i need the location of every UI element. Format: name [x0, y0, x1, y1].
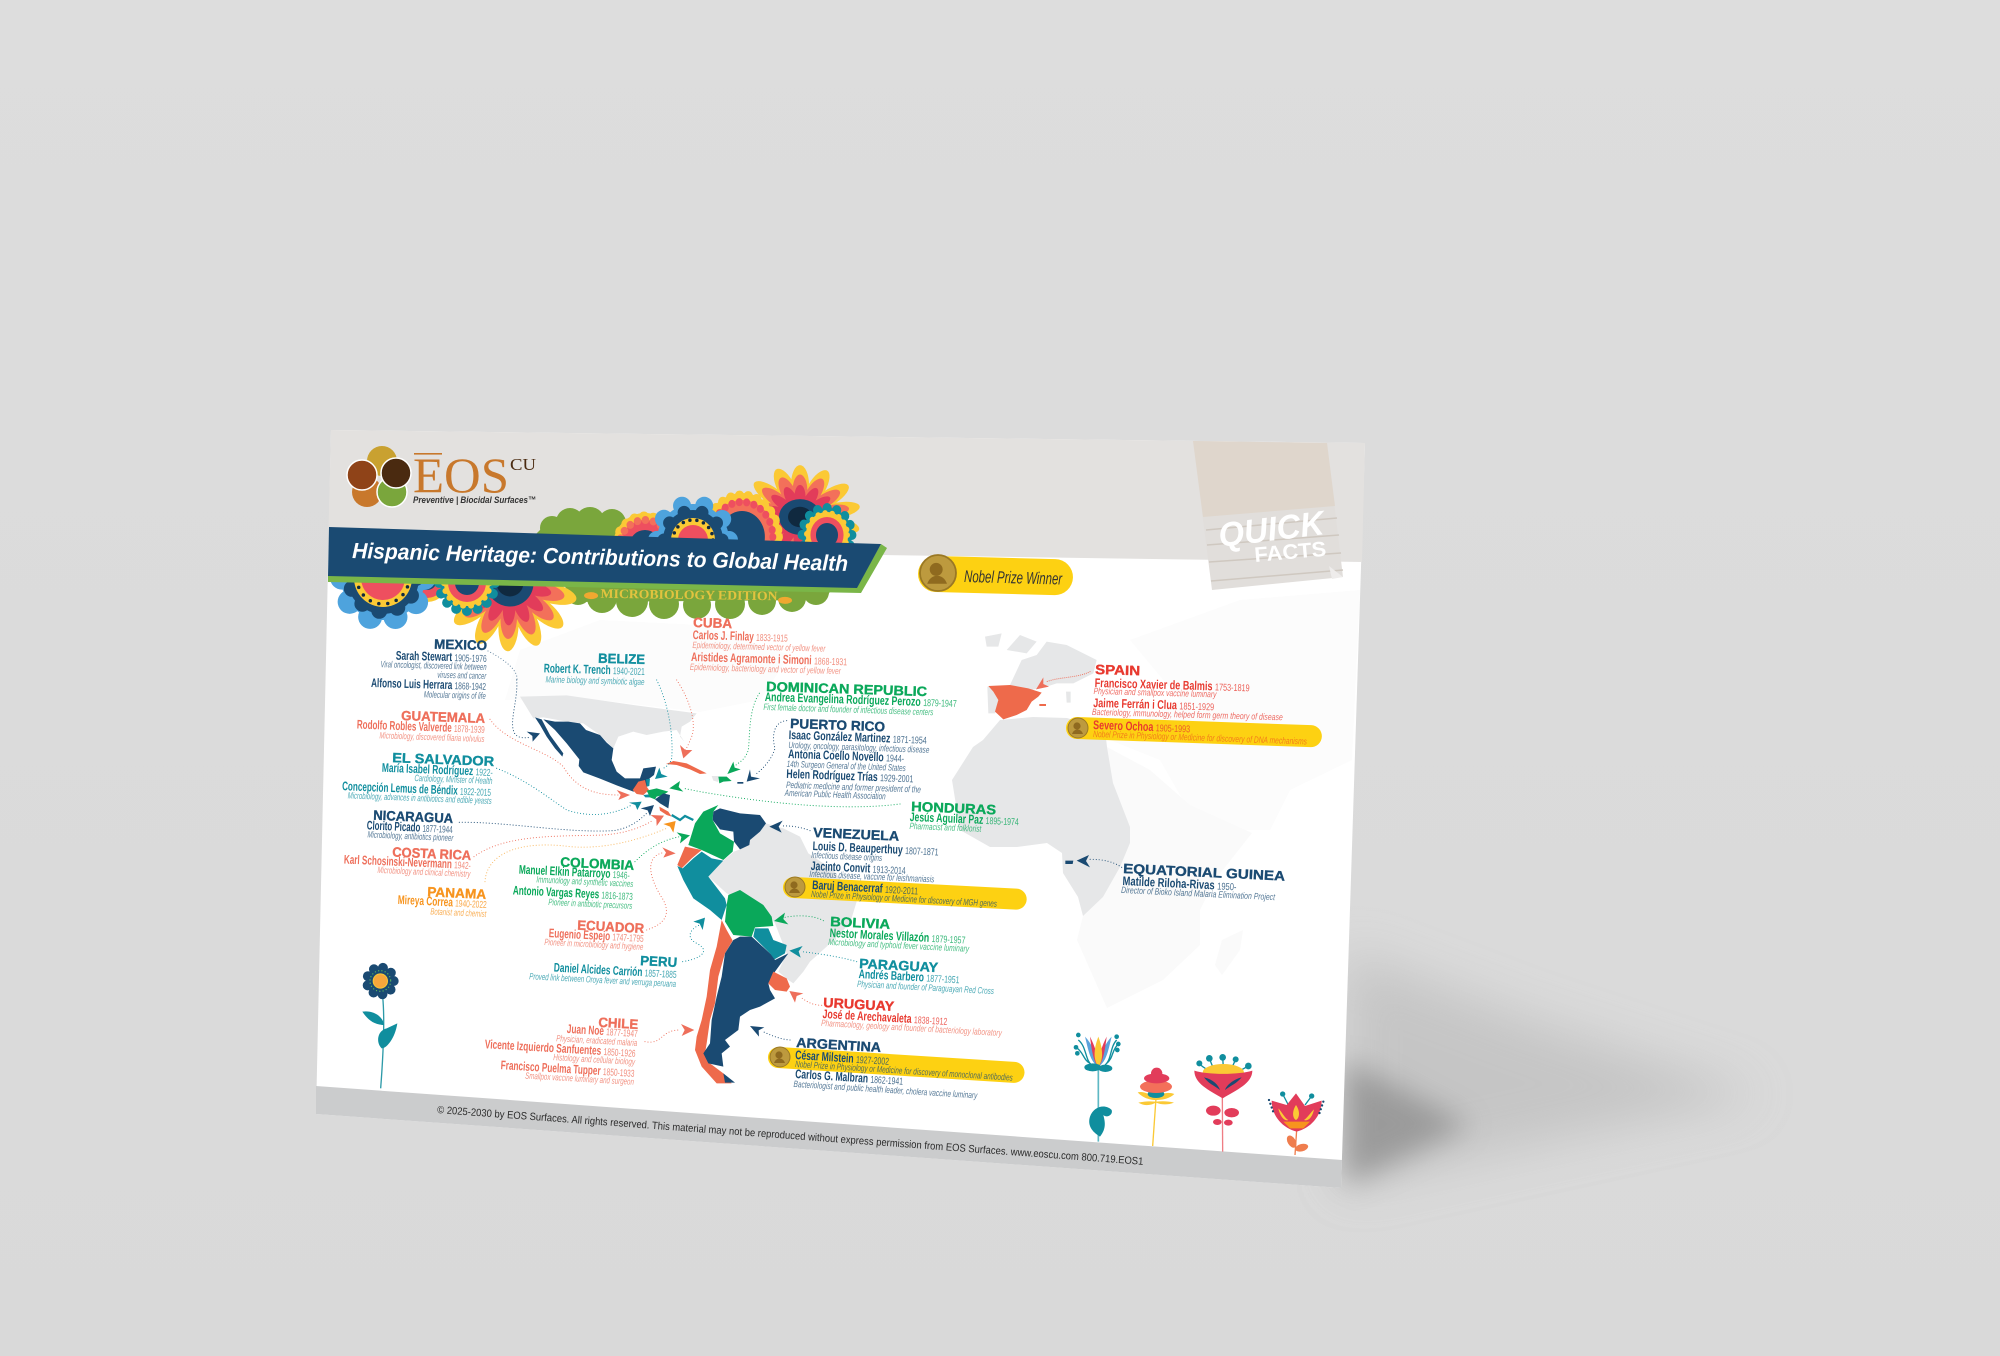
mexico heading: MEXICO — [434, 637, 487, 653]
flower: large coral and yellow — [703, 493, 781, 581]
cuba — [666, 761, 707, 774]
nicaragua block — [366, 807, 455, 843]
cuba block: Epidemiology, determined vector of yellow fever — [692, 640, 826, 654]
poster card — [316, 430, 1365, 1188]
mexico block: Molecular origins of life — [424, 689, 486, 701]
haiti — [712, 776, 718, 782]
venezuela block: Louis D. Beauperthuy 1807-1871 — [812, 839, 939, 858]
flower: coral bloom — [1138, 1068, 1174, 1146]
title banner — [328, 527, 887, 593]
spain block: Jaime Ferrán i Clua 1851-1929 — [1093, 696, 1215, 713]
bottom-right flowers — [1074, 1033, 1323, 1155]
connector: spain — [1047, 672, 1090, 682]
costa rica — [659, 807, 672, 817]
paraguay block: Andrés Barbero 1877-1951 — [858, 967, 960, 986]
mexico block: viruses and cancer — [437, 670, 487, 681]
flower: teal small — [434, 584, 500, 616]
peru heading: PERU — [640, 953, 678, 970]
note top panel — [1193, 441, 1335, 517]
arrowheads: north and central america — [527, 732, 783, 858]
ecuador block: Pioneer in microbiology and hygiene — [544, 937, 644, 952]
nobel callout: severo ochoa: Severo Ochoa 1905-1993 — [1093, 718, 1191, 735]
belize block: Marine biology and symbiotic algae — [545, 674, 645, 687]
nobel callout: severo ochoa: Nobel Prize in Physiology or Medicine for discovery of DNA mechanisms — [1093, 729, 1307, 746]
flower: coral small — [422, 584, 441, 602]
puerto rico heading: PUERTO RICO — [790, 716, 885, 734]
spain block: Physician and smallpox vaccine luminary — [1093, 686, 1218, 699]
facts label: FACTS — [1253, 538, 1327, 567]
dominican republic block: Andrea Evangelina Rodríguez Perozo 1879-1947 — [765, 690, 957, 710]
faint land: Canada and Greenland — [505, 620, 790, 712]
argentina second person — [793, 1067, 979, 1101]
flower: daisy bottom — [444, 586, 576, 652]
banner ribbon — [328, 527, 881, 588]
connector: left group — [459, 719, 704, 1042]
venezuela block: Jacinto Convit 1913-2014 — [810, 859, 906, 877]
banner green edge — [328, 544, 887, 593]
uruguay block: José de Arechavaleta 1838-1912 — [822, 1007, 948, 1028]
quick label: QUICK — [1216, 504, 1329, 555]
south america countries — [677, 805, 857, 1083]
belize block — [543, 649, 646, 687]
uruguay heading: URUGUAY — [823, 995, 895, 1014]
colombia block: Manuel Elkin Patarroyo 1946- — [519, 863, 630, 882]
legend: nobel prize winner — [918, 555, 1073, 596]
colombia — [688, 805, 734, 860]
paraguay heading: PARAGUAY — [859, 956, 939, 975]
bolivia — [725, 890, 773, 937]
uruguay — [768, 972, 790, 992]
flower: red dome — [1194, 1054, 1252, 1152]
ecuador — [677, 847, 702, 868]
argentina second person: Carlos G. Malbran 1862-1941 — [795, 1067, 904, 1088]
note fold — [1329, 566, 1343, 579]
arrowhead: equatorial guinea — [1077, 855, 1090, 867]
nobel callout: cesar milstein: César Milstein 1927-2002 — [795, 1048, 890, 1068]
belize block: Robert K. Trench 1940-2021 — [544, 661, 645, 678]
arrowheads: south america — [681, 913, 803, 1037]
colombia block: Immunology and synthetic vaccines — [536, 874, 634, 889]
venezuela heading: VENEZUELA — [813, 825, 900, 844]
chile heading: CHILE — [598, 1015, 639, 1032]
world map — [505, 590, 1360, 1083]
spain block: Bacteriology, immunology, helped form germ theory of disease — [1092, 707, 1283, 722]
bolivia heading: BOLIVIA — [830, 914, 891, 932]
cuba block — [690, 615, 849, 676]
chile block: Francisco Puelma Tupper 1850-1933 — [500, 1058, 635, 1080]
colombia block — [512, 852, 635, 911]
colombia heading: COLOMBIA — [560, 855, 635, 873]
costa rica block: Microbiology and clinical chemistry — [377, 865, 472, 879]
venezuela block — [809, 825, 940, 884]
flower: tulip — [1074, 1033, 1121, 1142]
connector: south group — [762, 916, 857, 1040]
chile block: Physician, eradicated malaria — [556, 1033, 637, 1048]
puerto rico block: Urology, oncology, parasitology, infectious disease — [788, 740, 930, 755]
belize — [646, 779, 650, 787]
footer band — [316, 1086, 1342, 1188]
puerto rico block: American Public Health Association — [784, 788, 886, 801]
grey land: United States — [520, 695, 697, 748]
flower cloud: green shape upper — [530, 507, 640, 545]
arrowhead: spain — [1036, 677, 1049, 689]
guatemala block: Rodolfo Robles Valverde 1878-1939 — [357, 718, 485, 736]
el salvador heading: EL SALVADOR — [392, 750, 495, 769]
guatemala heading: GUATEMALA — [401, 708, 486, 726]
honduras — [647, 788, 668, 799]
mexico block: Alfonso Luis Herrara 1868-1942 — [371, 676, 487, 693]
footer copyright: © 2025-2030 by EOS Surfaces. All rights reserved. This material may not be reproduced without express permission from EOS Surfaces. www.eoscu.com 800.719.EOS1 — [437, 1104, 1144, 1168]
flower: crown — [1269, 1091, 1323, 1155]
flower cloud: green shape lower — [560, 570, 840, 619]
honduras block: Pharmacist and folklorist — [909, 821, 982, 834]
chile — [695, 920, 733, 1083]
chile block: Juan Noé 1877-1947 — [566, 1022, 638, 1040]
guatemala block — [356, 707, 486, 744]
colombia block: Antonio Vargas Reyes 1816-1873 — [513, 883, 633, 903]
costa rica block — [343, 842, 472, 879]
puerto rico block: Helen Rodríguez Trías 1929-2001 — [786, 767, 914, 785]
flowers below banner — [330, 582, 576, 652]
mexico block: Sarah Stewart 1905-1976 — [396, 649, 487, 665]
connector: north group — [513, 680, 787, 774]
nicaragua heading: NICARAGUA — [373, 808, 454, 826]
medal icon — [1068, 718, 1088, 738]
connector lines — [459, 651, 1122, 1042]
medal icon — [770, 1047, 790, 1067]
panama block: Mireya Correa 1940-2022 — [398, 893, 487, 911]
nicaragua — [655, 793, 670, 808]
puerto rico block: Isaac González Martinez 1871-1954 — [789, 728, 927, 747]
uruguay block — [821, 995, 1004, 1038]
tierra del fuego — [723, 1073, 735, 1083]
medal icon — [785, 877, 805, 897]
chile block: Vicente Izquierdo Sanfuentes 1850-1926 — [484, 1037, 636, 1060]
peru — [677, 852, 727, 920]
connector: equatorial guinea — [1090, 859, 1122, 867]
panama — [672, 815, 693, 820]
equatorial guinea heading: EQUATORIAL GUINEA — [1123, 861, 1286, 884]
peru block: Daniel Alcides Carrión 1857-1885 — [553, 961, 677, 981]
nicaragua block: Clorito Picado 1877-1944 — [367, 818, 453, 836]
logo tagline: Preventive | Biocidal Surfaces™ — [413, 495, 536, 506]
legend pill — [918, 556, 1073, 596]
equatorial guinea marker — [1065, 861, 1073, 864]
flower: blue and navy — [657, 504, 729, 576]
colombia block: Pioneer in antibiotic precursors — [548, 897, 633, 911]
cuba block: Carlos J. Finlay 1833-1915 — [693, 628, 788, 645]
spain block: Francisco Xavier de Balmis 1753-1819 — [1095, 676, 1250, 694]
legend medal — [920, 555, 956, 591]
bottom-left flower — [362, 967, 397, 1088]
el salvador block: Concepción Lemus de Béndix 1922-2015 — [342, 779, 492, 799]
paraguay block — [857, 956, 996, 996]
belize heading: BELIZE — [598, 651, 645, 667]
pill background — [1066, 717, 1322, 748]
logo wordmark: EOS — [413, 447, 509, 503]
venezuela block: Infectious disease, vaccine for leishmaniasis — [809, 869, 935, 884]
guatemala — [633, 780, 649, 795]
el salvador block: María Isabel Rodríguez 1922- — [382, 761, 493, 779]
costa rica block: Karl Schosinski-Nevermann 1942- — [344, 852, 471, 872]
quick facts note — [1193, 441, 1343, 590]
argentina second person: Bacteriologist and public health leader, cholera vaccine luminary — [793, 1079, 979, 1101]
paraguay block: Physician and founder of Paraguayan Red Cross — [857, 979, 995, 996]
card shadow wide — [1345, 950, 1760, 1186]
dominican republic block — [763, 679, 958, 718]
el salvador block: Cardiology, Minister of Health — [414, 773, 493, 786]
pill background — [767, 1046, 1025, 1083]
paraguay — [753, 928, 787, 960]
legend text: Nobel Prize Winner — [964, 567, 1063, 589]
flowers above banner — [613, 465, 862, 581]
peru block: Proved link between Oroya fever and verruga peruana — [529, 971, 676, 989]
connector: mexico top — [488, 651, 517, 680]
panama heading: PANAMA — [427, 884, 487, 902]
chile block: Histology and cellular biology — [553, 1052, 636, 1067]
bolivia block: Microbiology and typhoid fever vaccine luminary — [828, 937, 970, 954]
venezuela — [713, 808, 766, 849]
dominican republic block: First female doctor and founder of infectious disease centers — [763, 702, 934, 717]
venezuela block: Infectious disease origins — [811, 850, 883, 863]
arrowheads — [527, 677, 1090, 1037]
puerto rico block — [784, 716, 930, 803]
equatorial guinea block — [1121, 861, 1286, 903]
el salvador — [643, 794, 651, 797]
chile block: Smallpox vaccine luminary and surgeon — [525, 1071, 634, 1087]
el salvador block: Microbiology, advances in antibiotics and edible yeasts — [348, 790, 492, 806]
bolivia block: Nestor Morales Villazón 1879-1957 — [829, 926, 966, 947]
argentina — [703, 937, 788, 1067]
flower: coral scallop — [613, 513, 677, 581]
logo circles — [347, 446, 411, 507]
banner title: Hispanic Heritage: Contributions to Global Health — [352, 538, 848, 576]
dominican republic heading: DOMINICAN REPUBLIC — [766, 679, 928, 699]
nobel callout: baruj benacerraf — [782, 876, 1027, 910]
faint land: Asia and Middle East — [1110, 590, 1360, 830]
ecuador block: Eugenio Espejo 1747-1795 — [549, 926, 644, 945]
nobel callout: baruj benacerraf: Nobel Prize in Physiology or Medicine for discovery of MGH genes — [811, 889, 997, 909]
rest of south america — [708, 823, 857, 983]
header band — [328, 430, 1365, 562]
nobel callout: baruj benacerraf: Baruj Benacerraf 1920-2011 — [812, 878, 919, 898]
microbiology edition: MICROBIOLOGY EDITION — [600, 586, 778, 603]
honduras block — [909, 799, 1020, 835]
note paper — [1193, 441, 1343, 590]
flower: teal and yellow — [802, 508, 852, 562]
el salvador block — [342, 748, 495, 806]
cuba block: Aristides Agramonte i Simoni 1868-1931 — [691, 650, 848, 668]
cuba heading: CUBA — [693, 615, 733, 631]
nobel callout: severo ochoa — [1066, 717, 1322, 748]
puerto rico block: Antonia Coello Novello 1944- — [788, 747, 904, 765]
ecuador block — [544, 916, 645, 952]
guatemala block: Microbiology, discovered filaria volvulus — [379, 730, 485, 744]
mexico — [535, 717, 656, 792]
nicaragua block: Microbiology, antibiotics pioneer — [367, 829, 454, 843]
panama block: Botanist and chemist — [430, 906, 487, 919]
grey land: West and Central Africa — [952, 717, 1130, 916]
chile block — [483, 1008, 639, 1087]
nobel callout: cesar milstein — [767, 1046, 1025, 1083]
spain block — [1092, 662, 1284, 722]
peru block — [529, 947, 678, 989]
faint land: southern and eastern Africa — [1077, 747, 1252, 1008]
connector: honduras and venezuela — [683, 788, 900, 831]
north and central america countries — [535, 717, 743, 820]
spain country shape — [988, 685, 1046, 719]
honduras block: Jesús Aguilar Paz 1895-1974 — [910, 810, 1019, 828]
mexico block: Viral oncologist, discovered link between — [380, 659, 487, 672]
logo — [347, 446, 536, 507]
note lines — [1206, 518, 1343, 581]
spain heading: SPAIN — [1095, 662, 1140, 678]
logo superscript: CU — [510, 455, 536, 474]
ecuador heading: ECUADOR — [577, 918, 645, 936]
faint land: Madagascar — [1215, 930, 1243, 975]
mexico block — [371, 635, 488, 701]
dominican republic — [718, 777, 732, 783]
nobel callout: cesar milstein: Nobel Prize in Physiology or Medicine for discovery of monoclonal antibodies — [795, 1059, 1013, 1083]
flower: blue and navy bottom — [330, 582, 434, 629]
honduras heading: HONDURAS — [911, 799, 996, 817]
argentina heading: ARGENTINA — [796, 1035, 882, 1055]
logo macron — [414, 453, 442, 455]
costa rica heading: COSTA RICA — [392, 845, 472, 863]
bolivia block — [828, 914, 971, 954]
puerto rico block: 14th Surgeon General of the United States — [787, 759, 906, 773]
grey land: Europe and Africa — [985, 633, 1097, 713]
uruguay block: Pharmacology, geology and founder of bacteriology laboratory — [821, 1018, 1003, 1038]
equatorial guinea block: Director of Bioko Island Malaria Elimination Project — [1121, 885, 1276, 902]
equatorial guinea block: Matilde Riloha-Rivas 1950- — [1122, 874, 1237, 893]
panama block — [397, 883, 488, 919]
flower: daisy top — [738, 465, 862, 569]
puerto rico — [737, 782, 743, 784]
card shadow core — [1345, 1060, 1470, 1186]
puerto rico block: Pediatric medicine and former president of the — [786, 780, 921, 795]
pill background — [782, 876, 1027, 910]
cuba block: Epidemiology, bacteriology and vector of yellow fever — [690, 662, 842, 676]
